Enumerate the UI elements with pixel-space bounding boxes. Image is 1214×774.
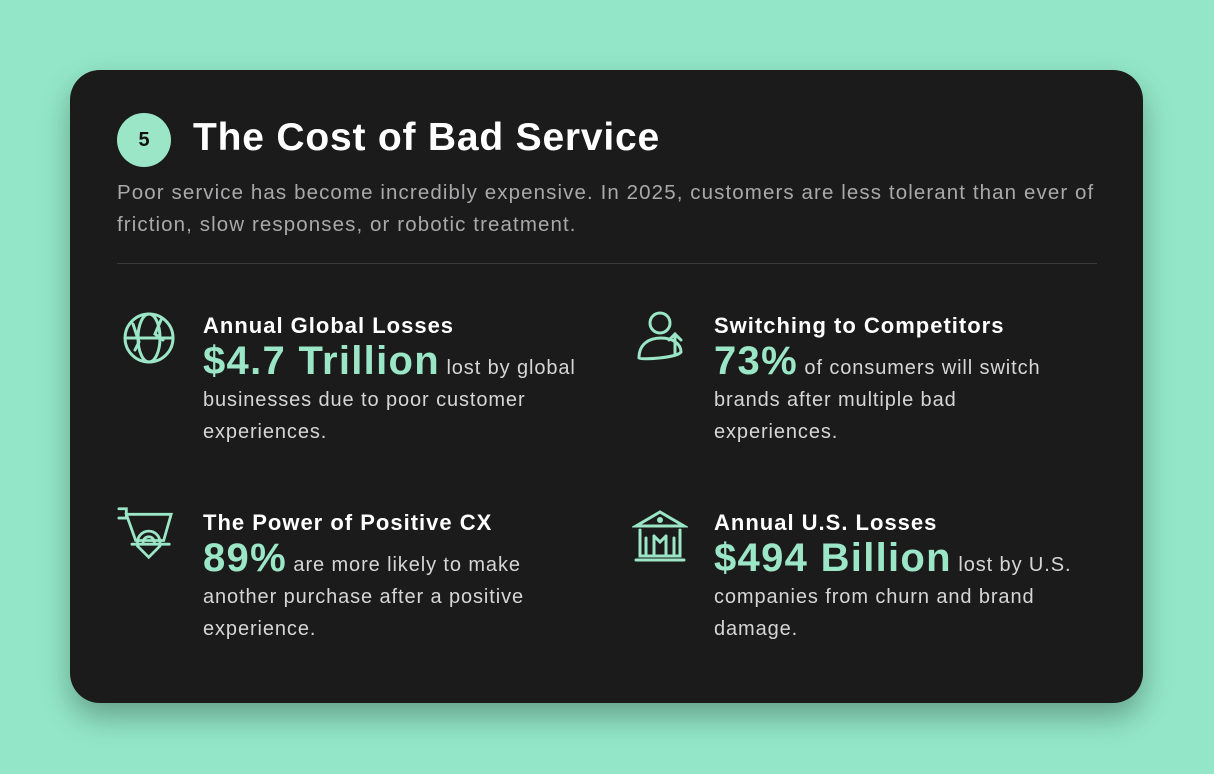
subtitle: friction, slow responses, or robotic treatment. <box>117 213 577 236</box>
item: switching to competitors <box>714 313 1041 443</box>
item: switching to competitors: experiences. <box>714 421 838 443</box>
item: positive CX: 89% are more likely to make <box>203 536 521 580</box>
item: positive CX <box>203 510 524 640</box>
item: positive CX: The Power of Positive CX <box>203 510 492 535</box>
icon: person switch <box>638 312 683 360</box>
item: switching to competitors: 73% of consumers will switch <box>714 339 1041 383</box>
icon: cart <box>118 507 173 560</box>
item: US losses: $494 Billion lost by U.S. <box>714 536 1071 580</box>
item: annual global losses: $4.7 Trillion lost by global <box>203 339 576 383</box>
item: positive CX: another purchase after a positive <box>203 586 524 608</box>
subtitle: Poor service has become incredibly expensive. In 2025, customers are less tolerant than ever of <box>117 181 1094 204</box>
item: switching to competitors: brands after multiple bad <box>714 389 957 411</box>
subtitle <box>117 181 1094 236</box>
item: US losses: damage. <box>714 618 798 640</box>
badge: 5: 5 <box>138 129 150 151</box>
item: annual global losses: experiences. <box>203 421 327 443</box>
item: US losses: companies from churn and brand <box>714 586 1034 608</box>
item: annual global losses: businesses due to poor customer <box>203 389 526 411</box>
card <box>70 70 1143 703</box>
item: annual global losses: Annual Global Losses <box>203 313 454 338</box>
title: The Cost of Bad Service <box>193 116 660 159</box>
item: switching to competitors: Switching to Competitors <box>714 313 1004 338</box>
item: US losses <box>714 510 1071 640</box>
icon: globe <box>124 312 174 364</box>
item: annual global losses <box>203 313 576 443</box>
icon: bank <box>632 510 688 562</box>
item: positive CX: experience. <box>203 618 316 640</box>
item: US losses: Annual U.S. Losses <box>714 510 937 535</box>
badge: 5 <box>117 113 171 167</box>
